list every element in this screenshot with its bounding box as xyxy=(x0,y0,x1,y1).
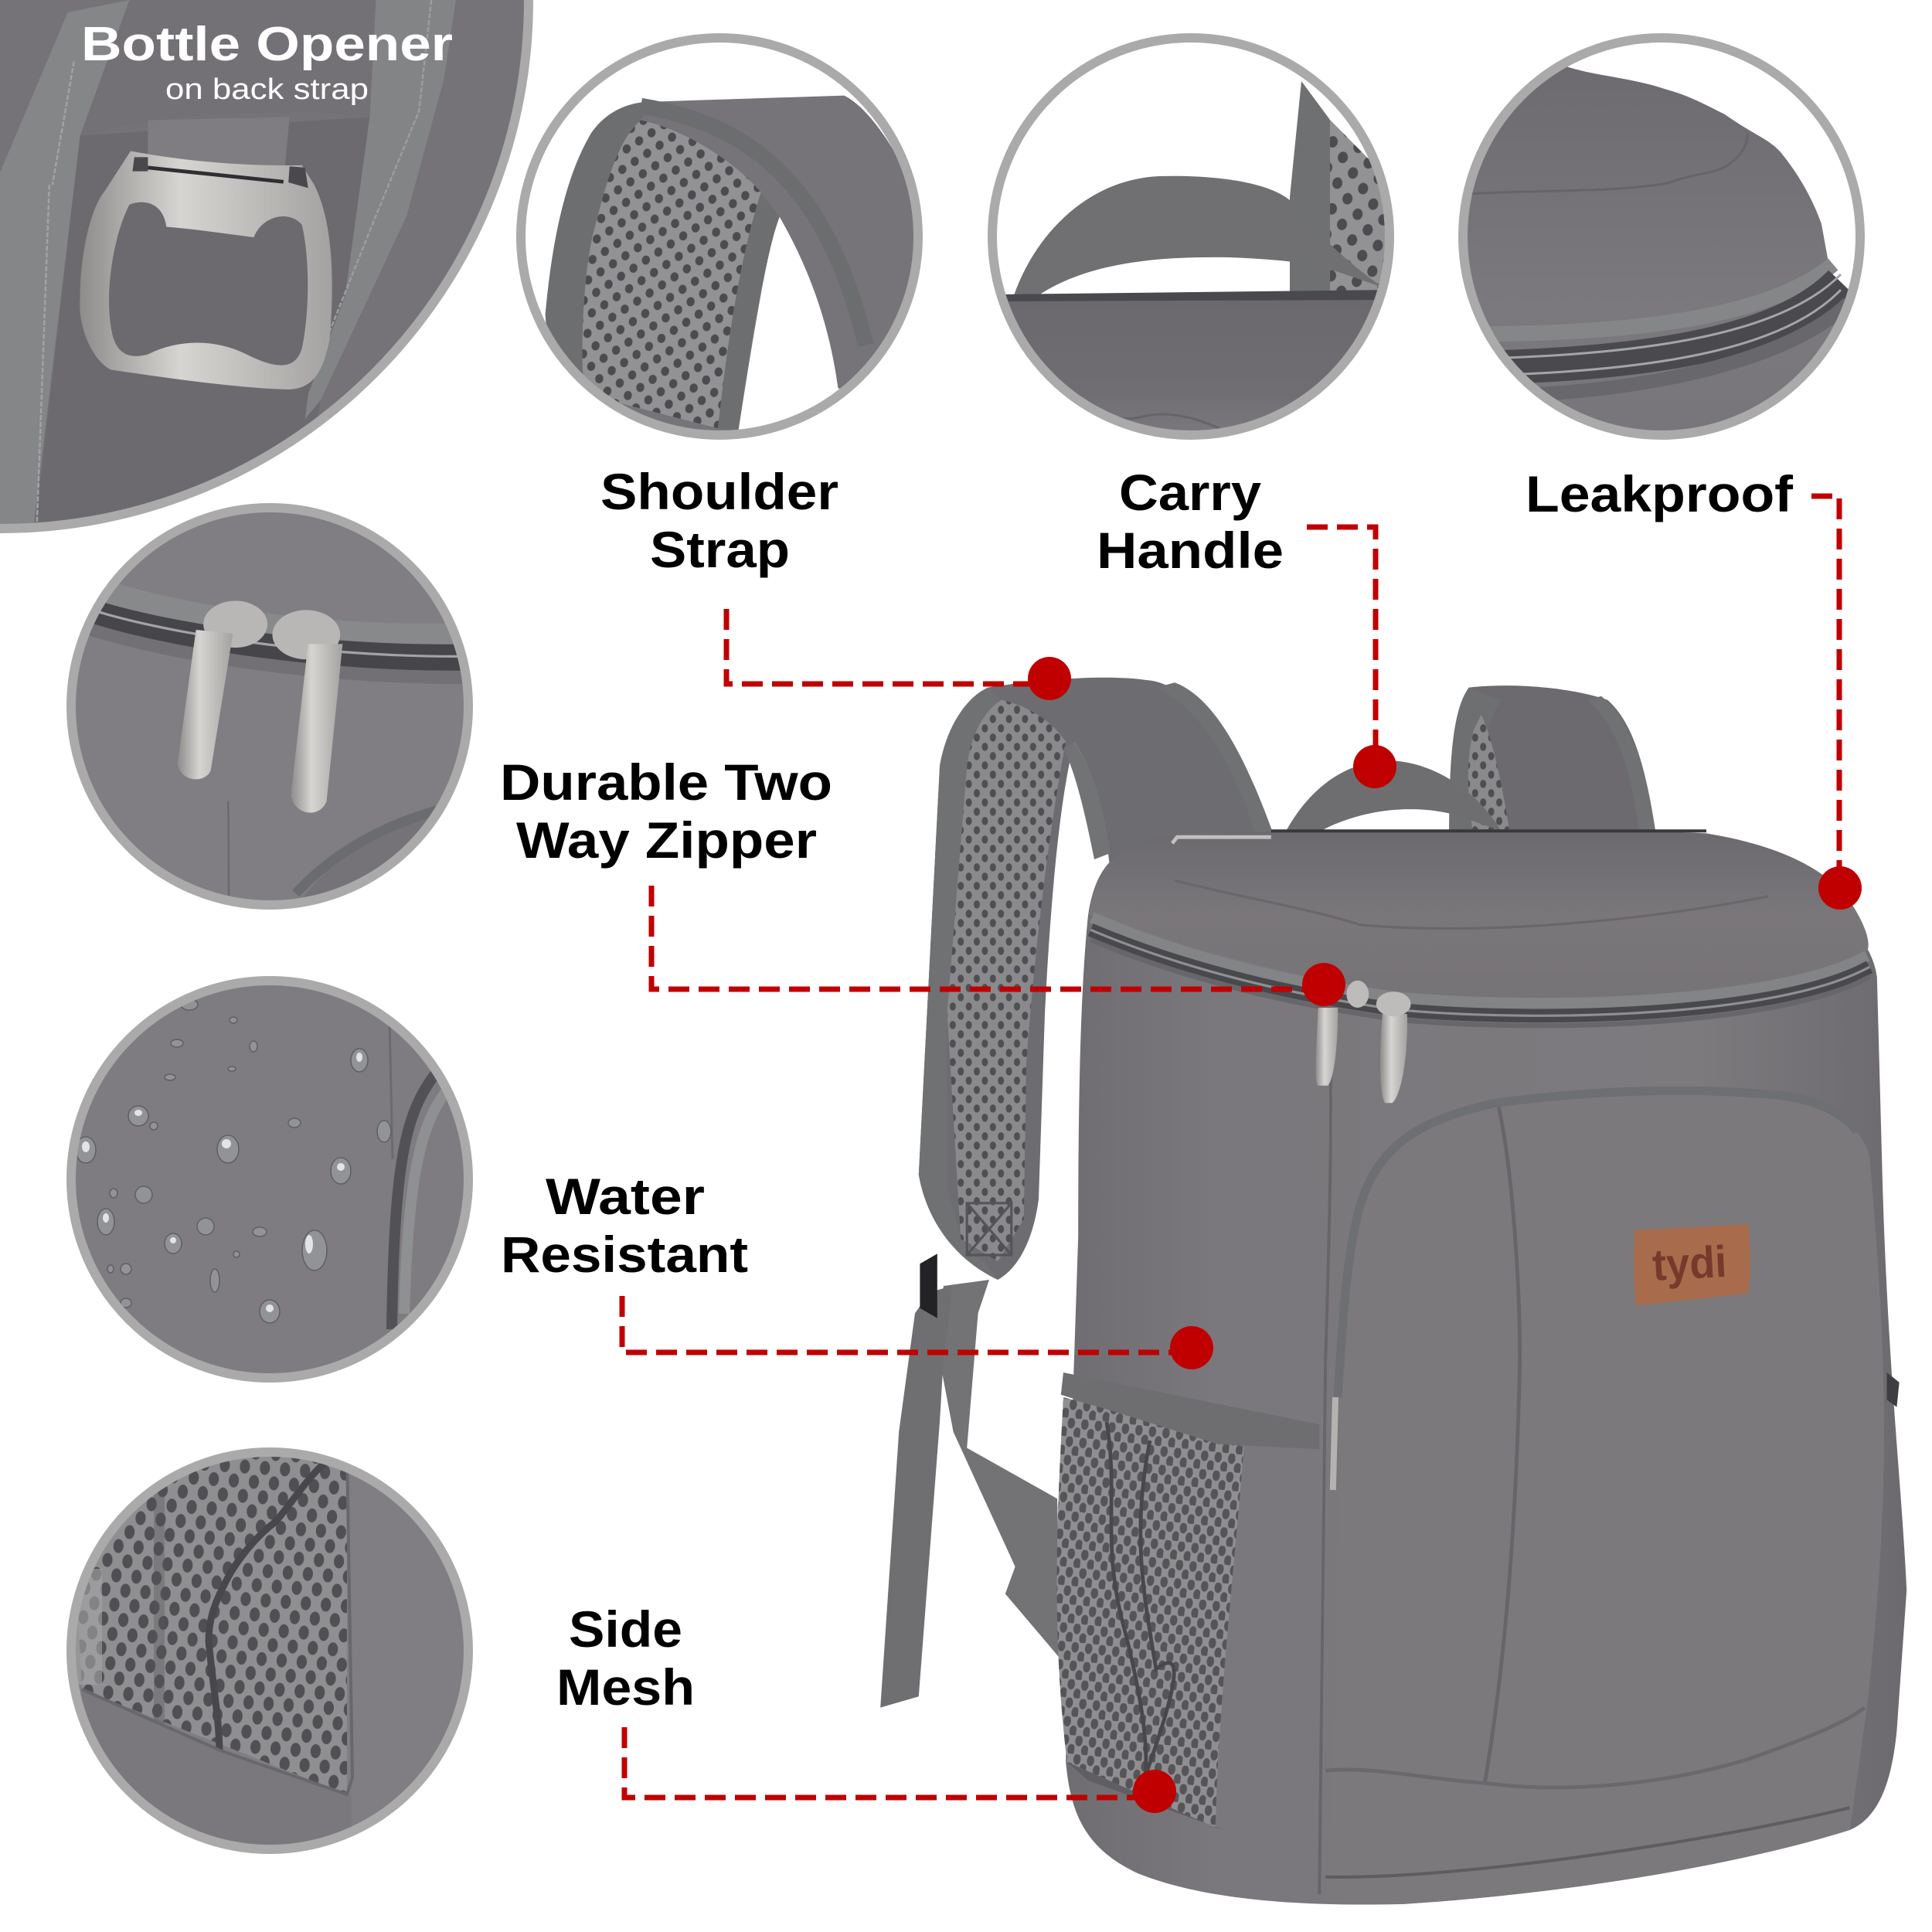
callout line: two way zipper xyxy=(651,886,1345,1006)
ring xyxy=(71,1452,468,1849)
ring xyxy=(71,508,468,905)
back right shoulder strap xyxy=(1449,685,1657,841)
droplet highlights xyxy=(82,1053,362,1312)
detail circle: bottle opener xyxy=(0,0,536,536)
label: Carry Handle: Carry xyxy=(1119,464,1261,521)
label: Water Resistant xyxy=(501,1168,748,1283)
metal opener xyxy=(80,151,332,389)
callout line: shoulder strap xyxy=(726,609,1071,700)
label: Durable Two Way Zipper: Way Zipper xyxy=(516,811,817,869)
main zipper with two pulls xyxy=(1090,917,1869,1103)
detail circle: carry handle xyxy=(981,31,1399,448)
label: Shoulder Strap xyxy=(600,463,838,578)
ring xyxy=(0,0,529,529)
main body xyxy=(1066,915,1906,1905)
subheading: on back strap: on back strap xyxy=(165,73,369,106)
ring xyxy=(71,981,468,1378)
label: Side Mesh xyxy=(556,1600,695,1716)
detail circle: water droplets xyxy=(71,981,468,1378)
detail circle: shoulder strap xyxy=(510,31,937,448)
label: Side Mesh: Mesh xyxy=(556,1658,695,1716)
label: Durable Two Way Zipper xyxy=(500,753,832,869)
carry handle xyxy=(1284,760,1501,833)
callout line: water resistant xyxy=(622,1296,1213,1369)
ring xyxy=(1463,38,1860,435)
heading: Bottle Opener: Bottle Opener xyxy=(81,18,453,71)
detail circle: two way zipper xyxy=(62,502,479,920)
front panel with bottom trim xyxy=(1319,1012,1900,1904)
label: Shoulder Strap: Strap xyxy=(650,521,790,578)
padded top lid xyxy=(1088,829,1869,1002)
water droplets xyxy=(76,999,391,1323)
lower webbing straps xyxy=(880,1253,1061,1708)
label: Water Resistant: Water xyxy=(546,1168,705,1225)
front left shoulder strap with mesh xyxy=(919,678,1274,1280)
detail circle: leakproof xyxy=(1453,31,1870,464)
label: Carry Handle xyxy=(1097,464,1284,579)
callout line: side mesh xyxy=(624,1727,1176,1813)
side mesh pocket xyxy=(1057,1372,1319,1830)
callout line: leakproof xyxy=(1811,496,1862,910)
ring xyxy=(992,38,1389,435)
detail circle: side mesh xyxy=(70,1452,468,1849)
label: Durable Two Way Zipper: Durable Two xyxy=(500,753,832,811)
label: Water Resistant: Resistant xyxy=(501,1226,748,1283)
label: Leakproof: Leakproof xyxy=(1526,465,1794,522)
brand patch: tydi xyxy=(1634,1224,1750,1306)
callout line: carry handle xyxy=(1307,527,1396,788)
photo: strap and opener xyxy=(0,0,456,524)
ring xyxy=(521,38,918,435)
brand patch: tydi: tydi xyxy=(1651,1237,1728,1291)
label: Carry Handle: Handle xyxy=(1097,522,1284,579)
label: Side Mesh: Side xyxy=(569,1600,682,1658)
label: Shoulder Strap: Shoulder xyxy=(600,463,838,520)
backpack product illustration xyxy=(880,678,1906,1905)
